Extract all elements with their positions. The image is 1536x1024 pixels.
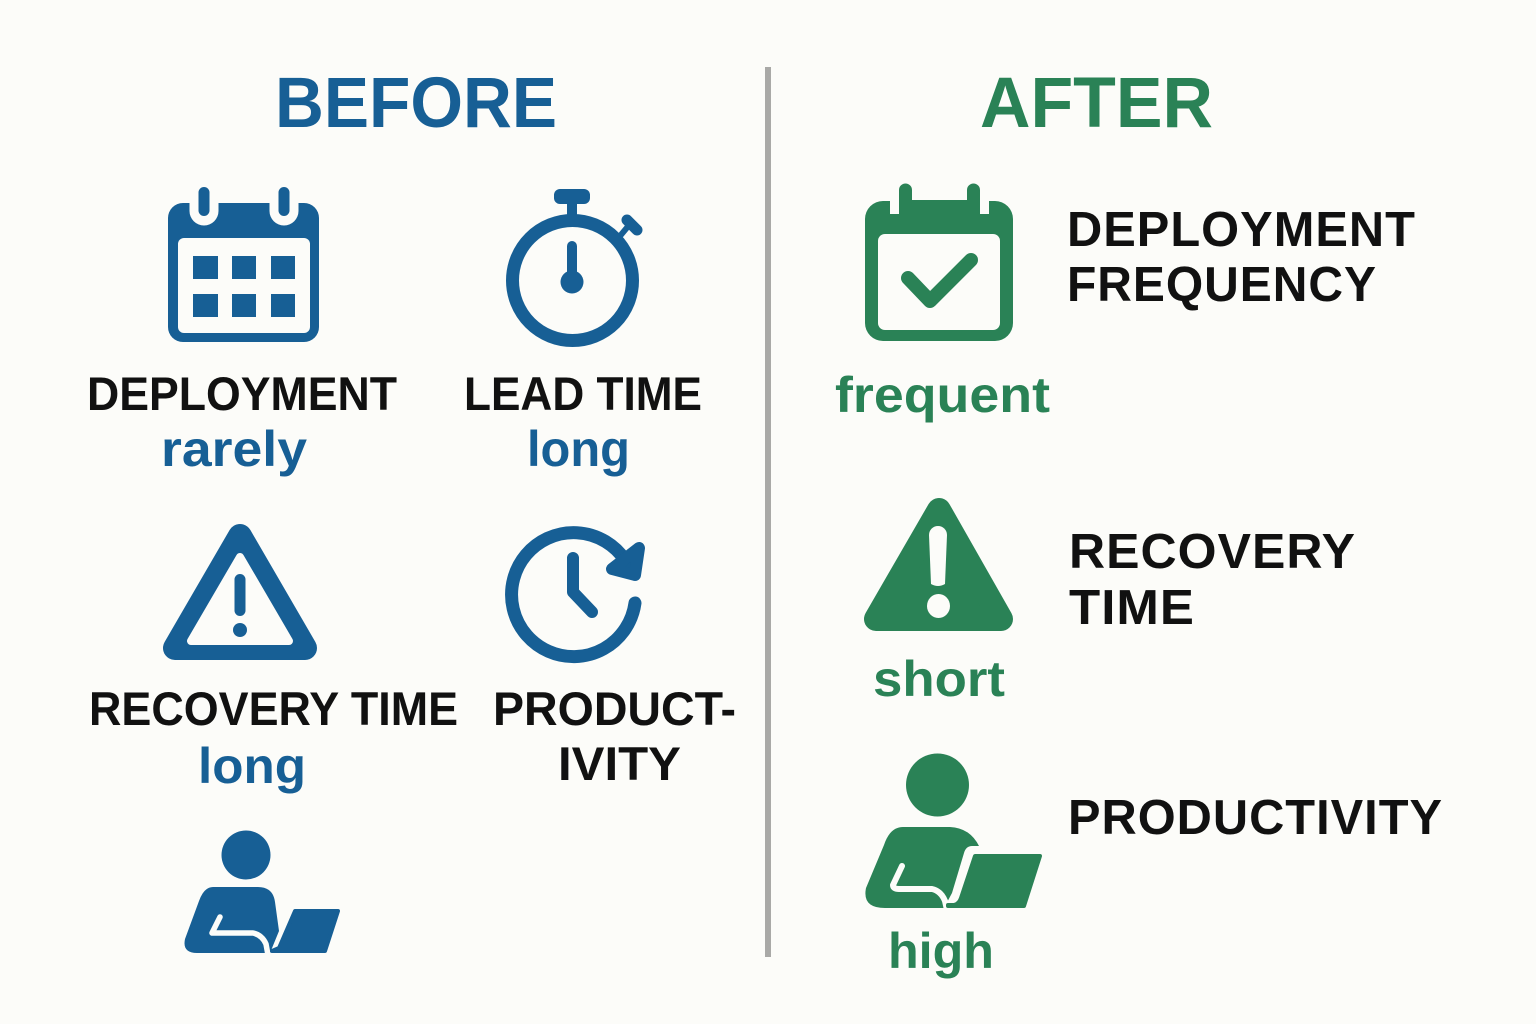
- value: rarely: rarely: [161, 421, 307, 477]
- label: RECOVERY TIME: RECOVERY: [1069, 525, 1356, 579]
- label: RECOVERY TIME: [1069, 525, 1356, 635]
- heading: BEFORE: BEFORE: [275, 64, 557, 143]
- icon: green calendar with check: [865, 184, 1013, 341]
- label: DEPLOYMENT FREQUENCY: DEPLOYMENT: [1067, 203, 1416, 257]
- icon: blue calendar: [168, 187, 319, 342]
- label: RECOVERY TIME: TIME: [1069, 581, 1195, 635]
- label: RECOVERY TIME: RECOVERY TIME: [89, 682, 458, 735]
- value: high: high: [888, 923, 994, 979]
- value: long (recovery): long: [198, 738, 306, 794]
- label: LEAD TIME: LEAD TIME: [464, 367, 702, 420]
- label: DEPLOYMENT: DEPLOYMENT: [87, 367, 397, 420]
- icon: green person at laptop: [865, 754, 1040, 910]
- panel: after column: [835, 184, 1443, 979]
- value: long (lead time): long: [527, 421, 630, 477]
- icon: blue warning triangle: [175, 536, 305, 648]
- icon: green warning triangle: [876, 510, 1001, 619]
- value: short: short: [873, 651, 1005, 707]
- label: PRODUCT-IVITY: PRODUCT-: [493, 682, 736, 735]
- heading: AFTER: AFTER: [980, 64, 1213, 143]
- label: PRODUCT-IVITY: IVITY: [558, 737, 681, 790]
- label: PRODUCTIVITY: PRODUCTIVITY: [1068, 791, 1443, 845]
- icon: blue clock with arrow: [512, 533, 639, 657]
- value: frequent: frequent: [835, 367, 1050, 423]
- label: DEPLOYMENT FREQUENCY: [1067, 203, 1416, 312]
- icon: blue person at laptop: [184, 830, 338, 955]
- icon: blue stopwatch: [512, 189, 637, 340]
- label: PRODUCT-IVITY: [493, 682, 736, 790]
- panel: before column: [87, 187, 736, 955]
- label: DEPLOYMENT FREQUENCY: FREQUENCY: [1067, 258, 1377, 312]
